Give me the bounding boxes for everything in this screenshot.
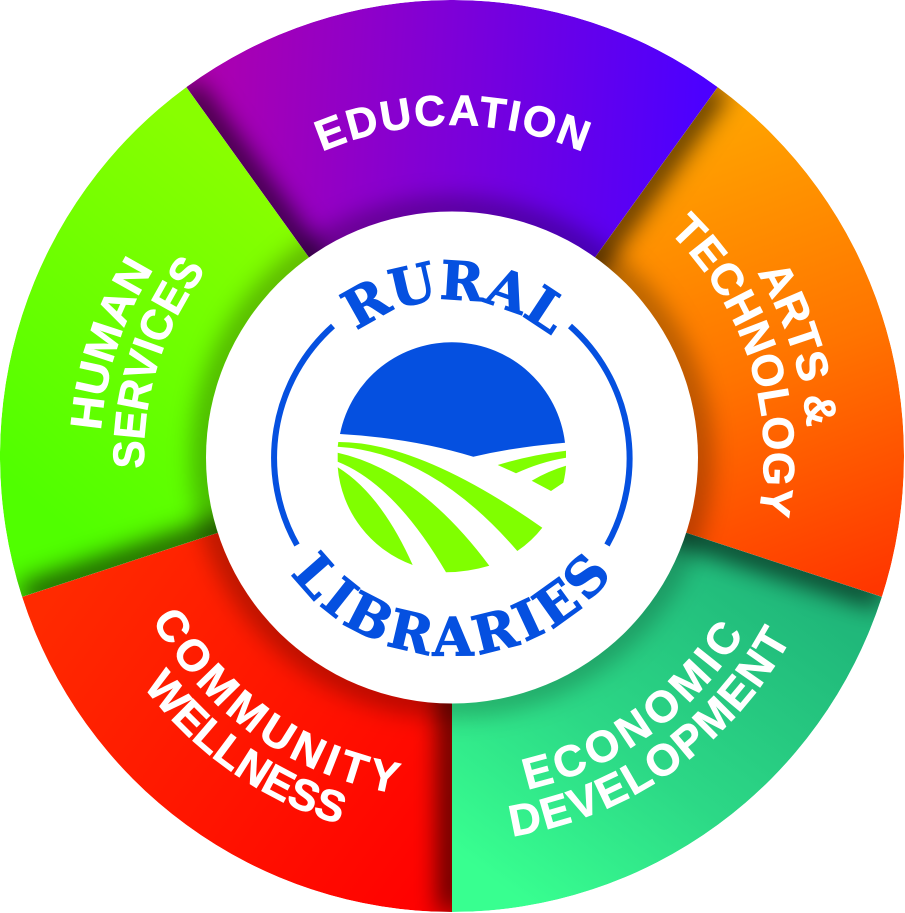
heading: rural: RURAL: [338, 260, 562, 336]
heading: libraries: LIBRARIES: [291, 550, 607, 656]
panel: human services segment: [0, 87, 309, 597]
label: economic development: ECONOMIC: [522, 622, 740, 790]
label: arts and technology: ARTS &: [758, 268, 836, 426]
label: community wellness: COMMUNITY: [156, 610, 402, 792]
icon: right ring arc: [570, 326, 630, 545]
panel: economic development segment: [452, 532, 882, 912]
icon: left ring arc: [274, 326, 333, 545]
panel: arts and technology segment: [595, 87, 904, 597]
icon: blue sun: [340, 342, 565, 457]
label: human services: SERVICES: [112, 258, 202, 468]
panel: community wellness segment: [22, 532, 452, 912]
label: economic development: DEVELOPMENT: [508, 623, 786, 836]
label: human services: HUMAN: [70, 256, 152, 428]
label: community wellness: WELLNESS: [148, 666, 346, 822]
panel: education segment: [186, 0, 718, 258]
icon: green field rows: [338, 442, 566, 572]
label: arts and technology: TECHNOLOGY: [676, 210, 795, 519]
panel: central logo: [206, 212, 698, 704]
label: human services: [70, 256, 202, 468]
label: education: EDUCATION: [314, 95, 592, 152]
